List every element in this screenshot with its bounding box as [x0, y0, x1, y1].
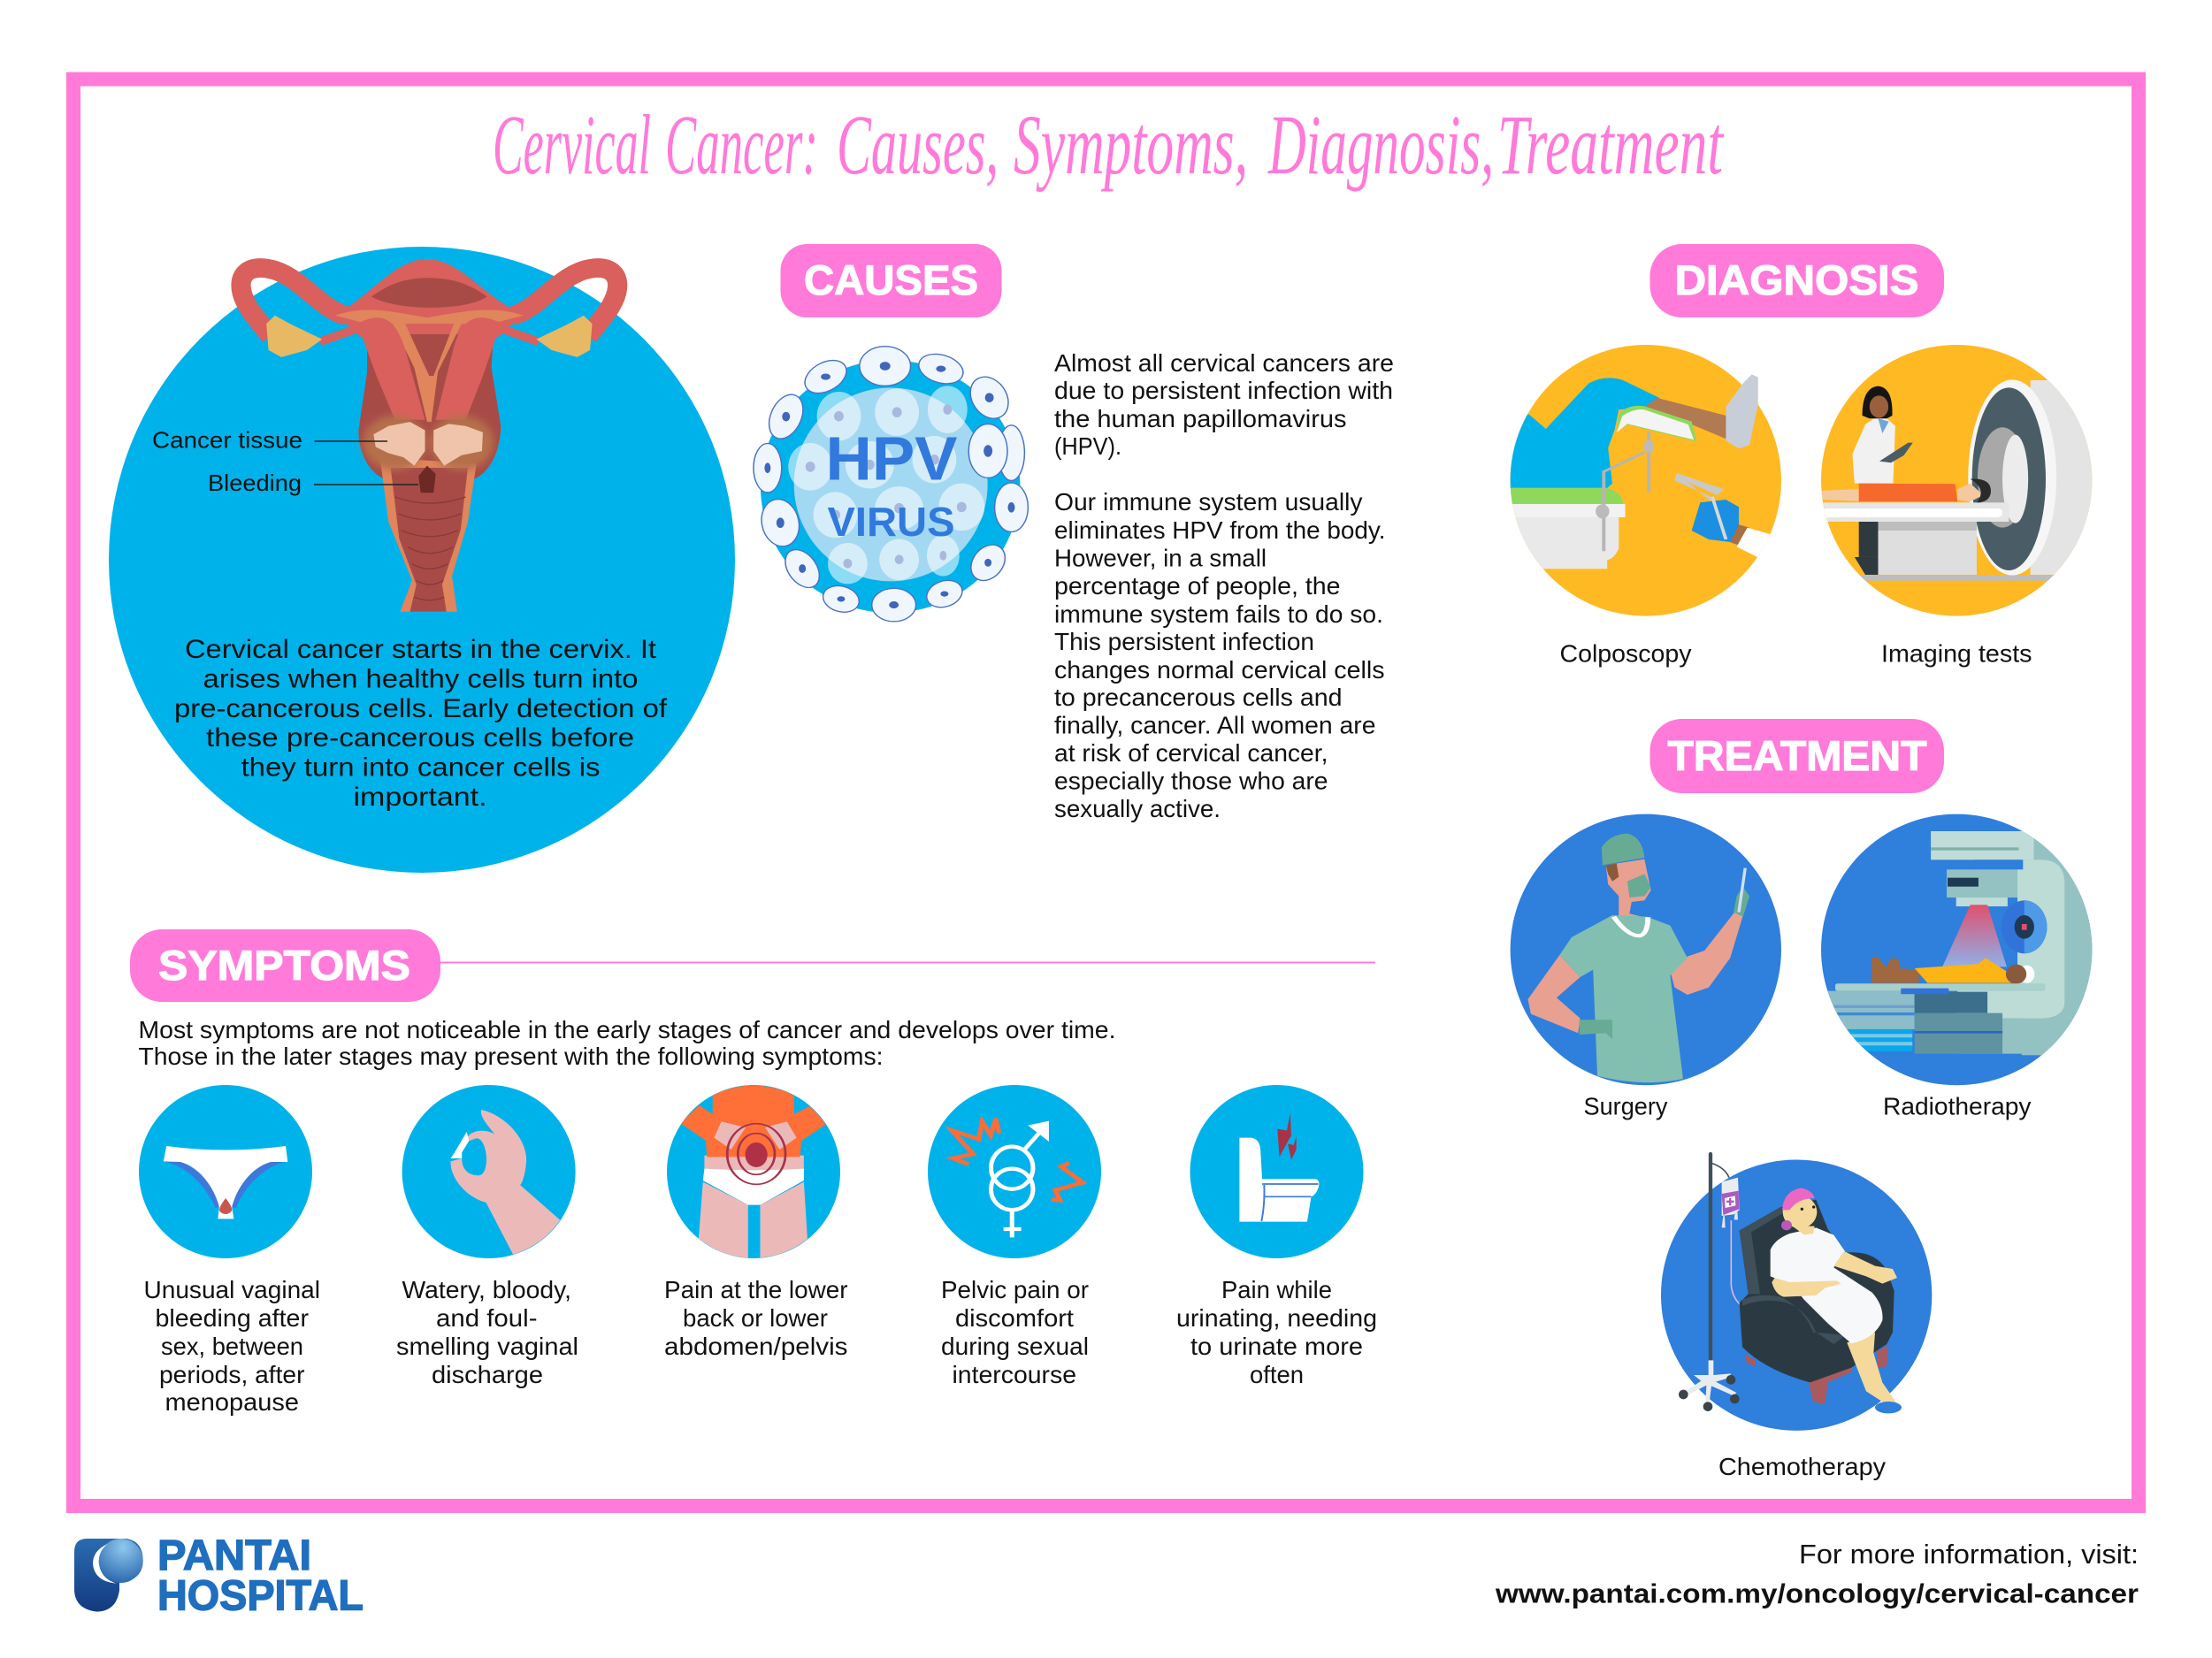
text: causes explanation: percentage of people, the — [1054, 572, 1341, 600]
label: pelvic pain: discomfort — [955, 1304, 1074, 1332]
label: urination pain: to urinate more — [1190, 1333, 1363, 1360]
heading: treatment — [1650, 719, 1944, 793]
label: unusual vaginal bleeding: menopause — [165, 1388, 299, 1416]
text: causes explanation: especially those who are — [1054, 768, 1328, 794]
text: cervical cancer description: important. — [354, 783, 486, 812]
text: causes explanation: finally, cancer. All women are — [1054, 711, 1376, 739]
label: pelvic pain — [941, 1276, 1089, 1388]
heading: treatment: TREATMENT — [1668, 732, 1927, 779]
label: vaginal discharge — [396, 1276, 578, 1388]
title — [493, 97, 1725, 192]
text: cervical cancer description: they turn into cancer cells is — [241, 753, 600, 782]
title: Cervical — [493, 97, 651, 192]
illustration: uterus and cervix — [241, 259, 617, 612]
text: cervical cancer description: these pre-cancerous cells before — [206, 723, 634, 753]
illustration: chemotherapy — [1661, 1154, 1932, 1431]
illustration: colposcopy — [1507, 345, 1781, 616]
text: causes explanation: Almost all cervical cancers are — [1054, 349, 1394, 377]
heading: diagnosis: DIAGNOSIS — [1675, 256, 1919, 303]
label: pelvic pain: Pelvic pain or — [941, 1276, 1089, 1303]
label: vaginal discharge: discharge — [432, 1361, 543, 1388]
title: Treatment — [1497, 97, 1725, 192]
logo: Pantai Hospital: HOSPITAL — [157, 1572, 364, 1620]
label: unusual vaginal bleeding: sex, between — [161, 1333, 303, 1360]
label: chemotherapy: Chemotherapy — [1718, 1453, 1886, 1480]
label: unusual vaginal bleeding: periods, after — [159, 1361, 304, 1388]
label: vaginal discharge: and foul- — [436, 1304, 538, 1332]
text: causes explanation — [1054, 349, 1394, 822]
label: lower back pain: Pain at the lower — [664, 1276, 847, 1303]
icon: hand with discharge — [402, 1085, 576, 1258]
label: vaginal discharge: Watery, bloody, — [402, 1276, 571, 1303]
panel: cervix overview circle — [109, 247, 735, 873]
text: symptoms introduction — [138, 1016, 1116, 1070]
label: lower back pain: back or lower — [683, 1304, 828, 1332]
text: causes explanation: This persistent infection — [1054, 628, 1314, 655]
footer: more information link — [1495, 1539, 2139, 1609]
text: causes explanation: due to persistent infection with — [1054, 377, 1393, 404]
title: Symptoms, — [1014, 97, 1248, 192]
illustration: surgery — [1511, 814, 1781, 1085]
logo: Pantai Hospital: PANTAI — [157, 1532, 311, 1579]
heading: symptoms: SYMPTOMS — [158, 942, 410, 989]
icon: HPV virus: VIRUS — [828, 499, 955, 545]
illustration: radiotherapy — [1821, 814, 2094, 1085]
icon: lower abdomen pain — [667, 1085, 840, 1258]
title: Cancer: — [665, 97, 818, 192]
text: causes explanation: sexually active. — [1054, 795, 1221, 822]
label: lower back pain — [664, 1276, 847, 1360]
text: causes explanation: However, in a small — [1054, 545, 1267, 571]
icon: toilet with pain — [1190, 1085, 1364, 1258]
label: urination pain: Pain while — [1221, 1276, 1332, 1303]
label: pelvic pain: intercourse — [952, 1361, 1076, 1388]
logo: Pantai Hospital — [74, 1532, 364, 1620]
label: radiotherapy: Radiotherapy — [1883, 1093, 2031, 1119]
text: cervical cancer description: arises when healthy cells turn into — [203, 665, 639, 693]
label: vaginal discharge: smelling vaginal — [396, 1333, 578, 1360]
text: causes explanation: to precancerous cells and — [1054, 684, 1343, 711]
title: Diagnosis, — [1267, 97, 1494, 192]
text: symptoms introduction: Those in the later stages may present with the following symptoms: — [138, 1043, 883, 1070]
heading: causes — [780, 244, 1001, 317]
illustration: imaging tests — [1818, 345, 2099, 616]
callout: bleeding: Bleeding — [208, 470, 302, 496]
label: pelvic pain: during sexual — [941, 1333, 1089, 1360]
callout: cancer tissue: Cancer tissue — [152, 426, 302, 453]
text: causes explanation: immune system fails to do so. — [1054, 600, 1383, 628]
text: cervical cancer description: Cervical cancer starts in the cervix. It — [185, 635, 657, 664]
label: surgery: Surgery — [1583, 1093, 1668, 1119]
icon: pain during intercourse — [928, 1085, 1101, 1258]
label: colposcopy: Colposcopy — [1560, 640, 1691, 667]
label: lower back pain: abdomen/pelvis — [664, 1333, 847, 1360]
label: unusual vaginal bleeding: Unusual vaginal — [143, 1276, 320, 1303]
text: causes explanation: the human papillomavirus — [1054, 405, 1346, 432]
text: causes explanation: Our immune system usually — [1054, 488, 1362, 516]
text: causes explanation: (HPV). — [1054, 432, 1121, 460]
label: unusual vaginal bleeding — [143, 1276, 320, 1416]
label: urination pain: urinating, needing — [1176, 1304, 1377, 1332]
label: urination pain: often — [1250, 1361, 1304, 1388]
label: imaging tests: Imaging tests — [1881, 640, 2032, 667]
text: causes explanation: eliminates HPV from the body. — [1054, 516, 1385, 544]
footer: more information link: www.pantai.com.my/oncology/cervical-cancer — [1495, 1578, 2139, 1609]
icon: underwear with blood drop — [139, 1085, 312, 1258]
label: urination pain — [1176, 1276, 1377, 1388]
label: unusual vaginal bleeding: bleeding after — [156, 1304, 309, 1332]
icon: HPV virus: HPV — [826, 424, 958, 493]
text: symptoms introduction: Most symptoms are not noticeable in the early stages of cancer and develops over time. — [138, 1016, 1116, 1043]
heading: diagnosis — [1650, 244, 1944, 317]
heading: symptoms — [130, 929, 1375, 1002]
footer: more information link: For more information, visit: — [1799, 1539, 2139, 1570]
icon: HPV virus — [754, 347, 1028, 622]
text: cervical cancer description: pre-cancerous cells. Early detection of — [174, 694, 668, 723]
text: cervical cancer description — [174, 635, 668, 812]
title: Causes, — [837, 97, 999, 192]
heading: causes: CAUSES — [804, 256, 978, 303]
text: causes explanation: changes normal cervical cells — [1054, 656, 1385, 684]
text: causes explanation: at risk of cervical cancer, — [1054, 739, 1328, 767]
